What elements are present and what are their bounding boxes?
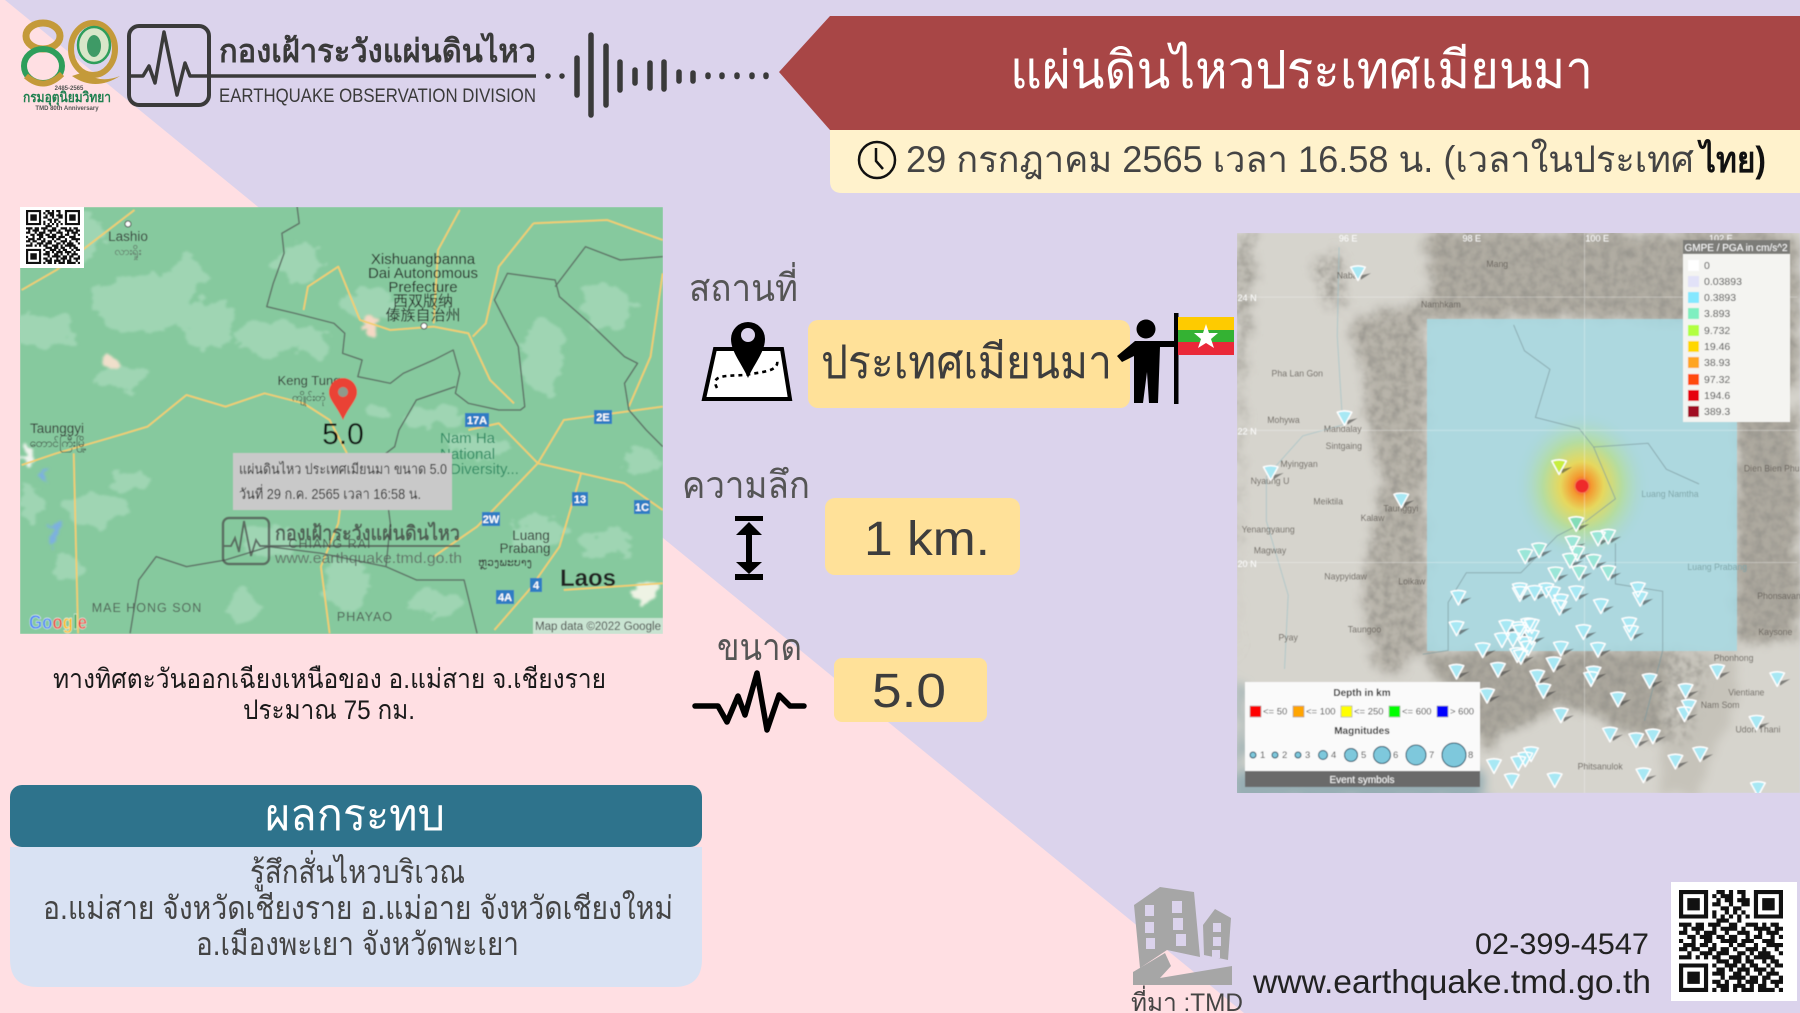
title banner: แผ่นดินไหวประเทศเมียนมา: [1010, 41, 1593, 100]
legend: PGA: GMPE / PGA in cm/s^2: [1684, 243, 1788, 254]
google attribution: Google: [29, 612, 87, 634]
map place labels: ຫຼວງພະບາງ: [478, 557, 532, 570]
date and time strip: 29 กรกฎาคม 2565 เวลา 16.58 น. (เวลาในประเทศ: [906, 138, 1694, 180]
value: location: ประเทศเมียนมา: [821, 336, 1112, 388]
terrain shading: [1230, 233, 1797, 802]
legend: depth and magnitudes: 7: [1429, 750, 1434, 761]
map watermark: www.earthquake.tmd.go.th: [274, 550, 462, 567]
map place labels: Lashio: [108, 229, 148, 244]
place names: Vientiane: [1728, 688, 1765, 698]
map place labels: 傣族自治州: [385, 307, 461, 324]
place names: Pyay: [1278, 632, 1298, 643]
legend: PGA: 9.732: [1704, 325, 1730, 337]
map watermark: [223, 518, 462, 567]
legend: depth and magnitudes: Event symbols: [1329, 775, 1395, 786]
map place labels: [29, 221, 616, 624]
place names: Nabai: [1337, 271, 1360, 281]
legend: depth and magnitudes: 4: [1331, 750, 1336, 761]
map place labels: Xishuangbanna: [371, 251, 476, 268]
title banner: [779, 16, 1800, 130]
place names: Pha Lan Gon: [1272, 369, 1323, 379]
QR code: website: [1671, 882, 1797, 1001]
map place labels: Diversity...: [450, 461, 519, 478]
map watermark: กองเฝ้าระวังแผ่นดินไหว: [275, 521, 460, 545]
place names: Mang: [1486, 259, 1508, 269]
map place labels: 西双版纳: [393, 293, 453, 310]
map: shakemap: [1230, 225, 1800, 805]
map pin epicentre: [322, 378, 364, 451]
logo: TMD 80th anniversary: TMD 80th Anniversary: [35, 106, 99, 112]
impact text: รู้สึกสั่นไหวบริเวณ: [250, 850, 465, 892]
value: magnitude: [834, 658, 987, 722]
logo: TMD 80th anniversary: 2485-2565: [55, 86, 84, 92]
legend: depth and magnitudes: <= 250: [1354, 706, 1384, 718]
place names: Magway: [1254, 545, 1287, 556]
place names: Sintgaing: [1326, 441, 1362, 451]
place names: Namhkam: [1421, 299, 1461, 310]
map place labels: Laos: [560, 565, 616, 592]
google attribution: Map data ©2022 Google: [535, 621, 661, 633]
place names: 96 E: [1339, 233, 1358, 243]
map road shields: 2W: [483, 514, 500, 526]
map place labels: တောင်ကြီးမြို့: [29, 434, 87, 453]
map place labels: MAE HONG SON: [92, 601, 202, 615]
map road shields: [465, 410, 650, 604]
map place labels: Keng Tung: [278, 373, 340, 388]
legend: PGA: 0.3893: [1704, 292, 1736, 304]
map place labels: Luang: [512, 528, 550, 543]
map place labels: Taunggyi: [30, 421, 84, 436]
map road shields: 17A: [467, 415, 487, 427]
legend: depth and magnitudes: 2: [1282, 750, 1287, 761]
icon: map with pin: [704, 322, 790, 399]
legend: depth and magnitudes: Magnitudes: [1334, 726, 1390, 737]
place names: 22 N: [1238, 426, 1257, 436]
value: depth: [825, 498, 1020, 575]
place names: 100 E: [1585, 233, 1609, 243]
legend: depth and magnitudes: <= 600: [1402, 706, 1432, 718]
logo: TMD 80th anniversary: กรมอุตุนิยมวิทยา: [23, 89, 111, 106]
impact text: อ.แม่สาย จังหวัดเชียงราย อ.แม่อาย จังหวัดเชียงใหม่: [43, 890, 673, 926]
map place labels: ကျိုင်းတုံ: [292, 391, 326, 406]
place names: 24 N: [1238, 293, 1257, 303]
legend: PGA: 194.6: [1704, 390, 1730, 402]
map roads: [22, 210, 663, 633]
legend: depth and magnitudes: 6: [1393, 750, 1398, 761]
place names: 98 E: [1462, 233, 1481, 243]
place names: 102 E: [1709, 233, 1733, 243]
legend: depth and magnitudes: 5: [1361, 750, 1366, 761]
place names: Nyaung U: [1251, 476, 1289, 486]
legend: depth and magnitudes: 1: [1260, 750, 1265, 761]
logo: earthquake observation division: EARTHQUAKE OBSERVATION DIVISION: [219, 86, 536, 107]
label: location: สถานที่: [689, 262, 798, 310]
map place labels: Prefecture: [388, 279, 458, 296]
place names: Yenangyaung: [1242, 524, 1295, 534]
map terrain patches: [13, 210, 659, 620]
background: pink diagonal: [0, 0, 1244, 1013]
place names: Meiktila: [1313, 497, 1343, 507]
date and time strip: [830, 130, 1800, 193]
legend: PGA: 3.893: [1704, 308, 1730, 320]
legend: depth and magnitudes: > 600: [1450, 706, 1474, 718]
icon: person with Myanmar flag: [1117, 313, 1234, 404]
rivers and borders: [1237, 233, 1797, 793]
label: depth: ความลึก: [682, 465, 810, 507]
icon: sound wave: [548, 35, 766, 115]
impact text: อ.เมืองพะเยา จังหวัดพะเยา: [196, 926, 519, 962]
terrain texture: [1237, 233, 1800, 747]
panel: impact: [10, 785, 702, 987]
map borders: [130, 207, 663, 633]
date and time strip: ไทย): [1696, 138, 1766, 180]
map road shields: 2E: [596, 412, 610, 424]
icon: seismic wave: [695, 673, 804, 730]
logo: TMD 80th anniversary: [23, 23, 120, 112]
legend: PGA: 97.32: [1704, 374, 1730, 386]
place names: Kalaw: [1361, 513, 1385, 523]
value: location: [808, 320, 1130, 408]
map road shields: 4A: [498, 592, 512, 604]
place names: Kaysone: [1758, 627, 1792, 637]
station shadows: [1273, 273, 1790, 782]
hazard square: [1427, 319, 1737, 651]
map place labels: PHAYAO: [337, 610, 393, 624]
map place labels: CHIANG RAI: [289, 537, 371, 551]
map info box: [233, 453, 452, 510]
impact text: [43, 850, 673, 962]
place names: Udon Thani: [1735, 724, 1780, 734]
map info box: วันที่ 29 ก.ค. 2565 เวลา 16:58 น.: [239, 484, 421, 503]
legend: depth and magnitudes: [1245, 682, 1480, 787]
place names: Phonsavan: [1757, 591, 1800, 601]
logo: earthquake observation division: [129, 26, 536, 107]
text: location description: ประมาณ 75 กม.: [243, 695, 415, 725]
place names: Dien Bien Phu: [1744, 463, 1800, 473]
place names: Mohywa: [1267, 415, 1300, 425]
place names: Phonhong: [1714, 653, 1754, 663]
logo: earthquake observation division: กองเฝ้าระวังแผ่นดินไหว: [219, 32, 536, 69]
map road shields: 13: [574, 494, 586, 506]
legend: depth and magnitudes: Depth in km: [1333, 688, 1391, 699]
value: depth: 1 km.: [864, 513, 990, 566]
place names: Loikaw: [1398, 576, 1426, 586]
epicentre marker: [1575, 479, 1589, 493]
text: phone: 02-399-4547: [1475, 928, 1649, 961]
icon: collapsed building: [1133, 887, 1232, 985]
legend: depth and magnitudes: 8: [1468, 750, 1473, 761]
map place labels: လားရှိုး: [115, 245, 142, 260]
place names: Mandalay: [1324, 424, 1362, 434]
value: magnitude: 5.0: [872, 665, 946, 718]
map place labels: National: [440, 446, 495, 463]
legend: depth and magnitudes: <= 50: [1263, 706, 1287, 718]
map road shields: 1C: [635, 502, 649, 514]
place names: Luang Prabang: [1687, 562, 1747, 572]
place names: Naypyidaw: [1324, 571, 1368, 581]
map pin epicentre: 5.0: [322, 418, 364, 451]
map info box: แผ่นดินไหว ประเทศเมียนมา ขนาด 5.0: [239, 460, 447, 478]
legend: PGA: 38.93: [1704, 357, 1730, 369]
legend: depth and magnitudes: <= 100: [1306, 706, 1336, 718]
legend: PGA: [1683, 240, 1790, 422]
text: location description: [53, 664, 606, 725]
place names: Nam Som: [1701, 700, 1740, 710]
legend: PGA: 0: [1704, 260, 1710, 272]
text: location description: ทางทิศตะวันออกเฉียงเหนือของ อ.แม่สาย จ.เชียงราย: [53, 664, 606, 694]
intensity heat zone: [1524, 422, 1640, 550]
impact heading: [10, 785, 702, 847]
place names: Taungoo: [1348, 625, 1381, 635]
impact heading: ผลกระทบ: [265, 791, 445, 840]
map place labels: Nam Ha: [440, 430, 496, 447]
icon: clock: [859, 142, 895, 178]
map place labels: Dai Autonomous: [368, 265, 478, 282]
legend: PGA: 19.46: [1704, 341, 1730, 353]
legend: depth and magnitudes: 3: [1305, 750, 1310, 761]
map place labels: Prabang: [499, 541, 551, 556]
legend: PGA: 389.3: [1704, 406, 1730, 418]
legend: PGA: 0.03893: [1704, 276, 1742, 288]
place names: 20 N: [1238, 559, 1257, 569]
icon: depth arrow: [735, 516, 763, 580]
place names: Phitsanulok: [1578, 762, 1623, 772]
text: website: www.earthquake.tmd.go.th: [1252, 963, 1651, 1000]
place names: Luang Namtha: [1641, 489, 1699, 499]
place names: [1238, 233, 1800, 772]
map road shields: 4: [533, 580, 540, 592]
QR code: map: [20, 207, 84, 268]
place names: Taunggyi: [1383, 504, 1418, 514]
place names: Myingyan: [1280, 459, 1318, 469]
seismic stations: [1263, 266, 1784, 796]
label: magnitude: ขนาด: [717, 627, 802, 669]
google attribution: [29, 612, 663, 634]
map: epicentre map: [13, 207, 663, 634]
